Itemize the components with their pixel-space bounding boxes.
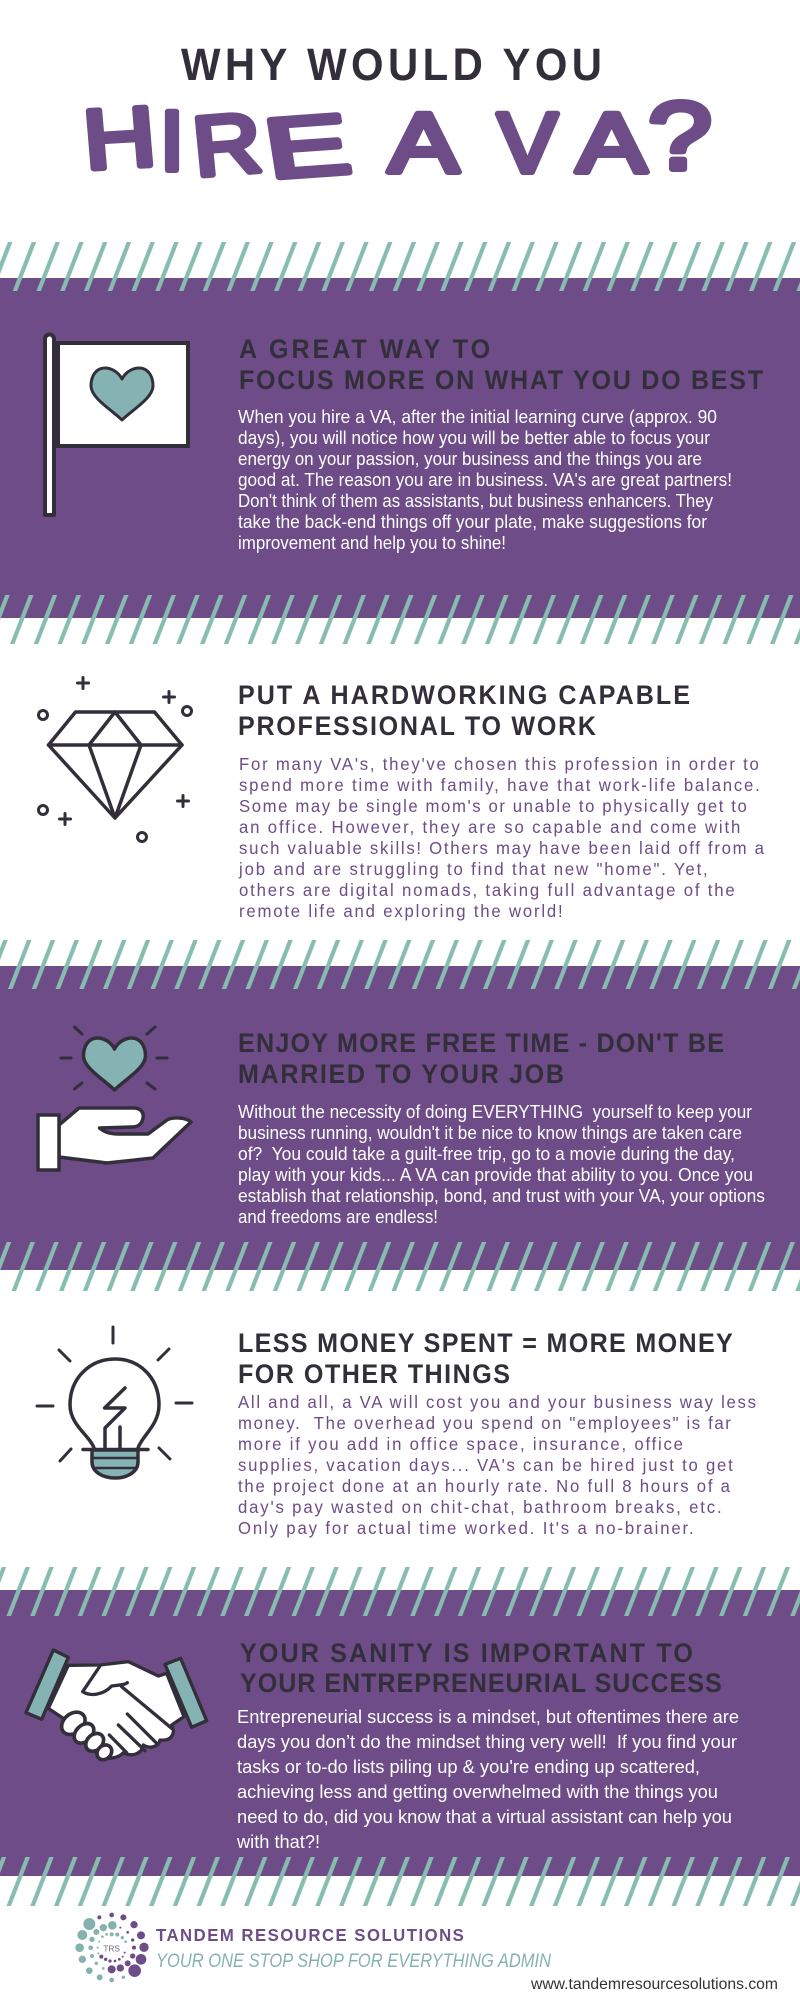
- body text: good at. The reason you are in business. VA's are great partners!: [238, 470, 732, 490]
- heading: [240, 1637, 722, 1698]
- footer: [75, 1913, 778, 1993]
- body text: supplies, vacation days... VA's can be hired just to get: [238, 1454, 733, 1475]
- body text: day's pay wasted on chit-chat, bathroom breaks, etc.: [238, 1496, 722, 1517]
- body text: tasks or to-do lists piling up & you're ending up scattered,: [237, 1757, 700, 1777]
- panel: less money spent: [37, 1327, 756, 1538]
- heading: [238, 1327, 733, 1389]
- heading: [239, 333, 763, 395]
- body text: more if you add in office space, insurance, office: [238, 1433, 683, 1454]
- company name: TANDEM RESOURCE SOLUTIONS: [156, 1924, 464, 1945]
- body text: and freedoms are endless!: [238, 1207, 438, 1227]
- body text: need to do, did you know that a virtual assistant can help you: [237, 1807, 732, 1827]
- body text: achieving less and getting overwhelmed with the things you: [237, 1782, 718, 1802]
- icon: flag with heart: [45, 334, 188, 515]
- body text: [238, 1391, 756, 1538]
- title line: hire a va: A: [576, 96, 646, 190]
- heading: FOR OTHER THINGS: [238, 1358, 510, 1389]
- title line: hire a va: V: [498, 96, 558, 190]
- body text: the project done at an hourly rate. No full 8 hours of a: [238, 1475, 730, 1496]
- icon: handshake: [26, 1650, 207, 1763]
- body text: with that?!: [236, 1832, 320, 1852]
- body text: business running, wouldn't it be nice to know things are taken care: [238, 1123, 742, 1143]
- title line: hire a va: R: [189, 94, 265, 194]
- logo: TRS: [103, 1945, 120, 1954]
- heading: [238, 679, 690, 741]
- body text: of? You could take a guilt-free trip, go to a movie during the day,: [238, 1144, 735, 1164]
- body text: such valuable skills! Others may have been laid off from a: [239, 837, 764, 858]
- body text: Some may be single mom's or unable to physically get to: [239, 795, 747, 816]
- heading: ENJOY MORE FREE TIME - DON'T BE: [238, 1027, 724, 1058]
- heading: YOUR ENTREPRENEURIAL SUCCESS: [240, 1667, 722, 1698]
- website: www.tandemresourcesolutions.com: [530, 1976, 778, 1993]
- icon: light bulb: [37, 1327, 192, 1478]
- panel: your sanity: [0, 1590, 800, 1876]
- body text: For many VA's, they've chosen this profession in order to: [239, 753, 759, 774]
- heading: FOCUS MORE ON WHAT YOU DO BEST: [239, 364, 763, 395]
- body text: job and are struggling to find that new "home". Yet,: [238, 858, 708, 879]
- body text: [238, 407, 732, 553]
- icon: hand holding heart: [38, 1027, 191, 1170]
- panel: focus on what you do best: [0, 278, 800, 618]
- body text: money. The overhead you spend on "employees" is far: [238, 1412, 731, 1433]
- panel: more free time: [0, 966, 800, 1270]
- body text: take the back-end things off your plate, make suggestions for: [238, 512, 707, 532]
- heading: LESS MONEY SPENT = MORE MONEY: [238, 1327, 733, 1358]
- body text: When you hire a VA, after the initial learning curve (approx. 90: [238, 407, 717, 427]
- title line: hire a va: A: [388, 96, 458, 190]
- body text: [238, 1102, 765, 1227]
- body text: Only pay for actual time worked. It's a no-brainer.: [238, 1517, 694, 1538]
- body text: spend more time with family, have that work-life balance.: [239, 774, 760, 795]
- title line: hire a va: ?: [648, 83, 712, 190]
- body text: others are digital nomads, taking full advantage of the: [239, 879, 735, 900]
- tagline: YOUR ONE STOP SHOP FOR EVERYTHING ADMIN: [156, 1951, 551, 1972]
- body text: establish that relationship, bond, and trust with your VA, your options: [238, 1186, 765, 1206]
- heading: YOUR SANITY IS IMPORTANT TO: [240, 1637, 693, 1668]
- title line: hire a va: I: [160, 94, 184, 188]
- title line: why would you: WHY WOULD YOU: [181, 41, 602, 90]
- heading: PUT A HARDWORKING CAPABLE: [238, 679, 690, 710]
- body text: Entrepreneurial success is a mindset, but oftentimes there are: [237, 1707, 739, 1727]
- heading: PROFESSIONAL TO WORK: [238, 710, 596, 741]
- body text: Without the necessity of doing EVERYTHING yourself to keep your: [238, 1102, 752, 1122]
- heading: MARRIED TO YOUR JOB: [238, 1058, 564, 1089]
- icon: diamond with sparkles: [38, 678, 192, 842]
- body text: All and all, a VA will cost you and your business way less: [238, 1391, 756, 1412]
- body text: energy on your passion, your business and the things you are: [238, 449, 702, 469]
- panel: hardworking capable professional: [38, 678, 764, 921]
- heading: [238, 1027, 724, 1089]
- body text: [236, 1707, 739, 1852]
- body text: an office. However, they are so capable and come with: [239, 816, 740, 837]
- body text: remote life and exploring the world!: [239, 900, 563, 921]
- heading: A GREAT WAY TO: [239, 333, 490, 364]
- body text: improvement and help you to shine!: [238, 533, 506, 553]
- body text: days you don’t do the mindset thing very well! If you find your: [237, 1732, 737, 1752]
- title line: hire a va: E: [262, 94, 355, 196]
- body text: play with your kids... A VA can provide that ability to you. Once you: [238, 1165, 753, 1185]
- body text: days), you will notice how you will be better able to focus your: [238, 428, 710, 448]
- body text: Don't think of them as assistants, but business enhancers. They: [238, 491, 713, 511]
- title line: hire a va: H: [81, 88, 159, 187]
- logo: [75, 1913, 149, 1982]
- body text: [238, 753, 764, 921]
- title: [81, 41, 712, 196]
